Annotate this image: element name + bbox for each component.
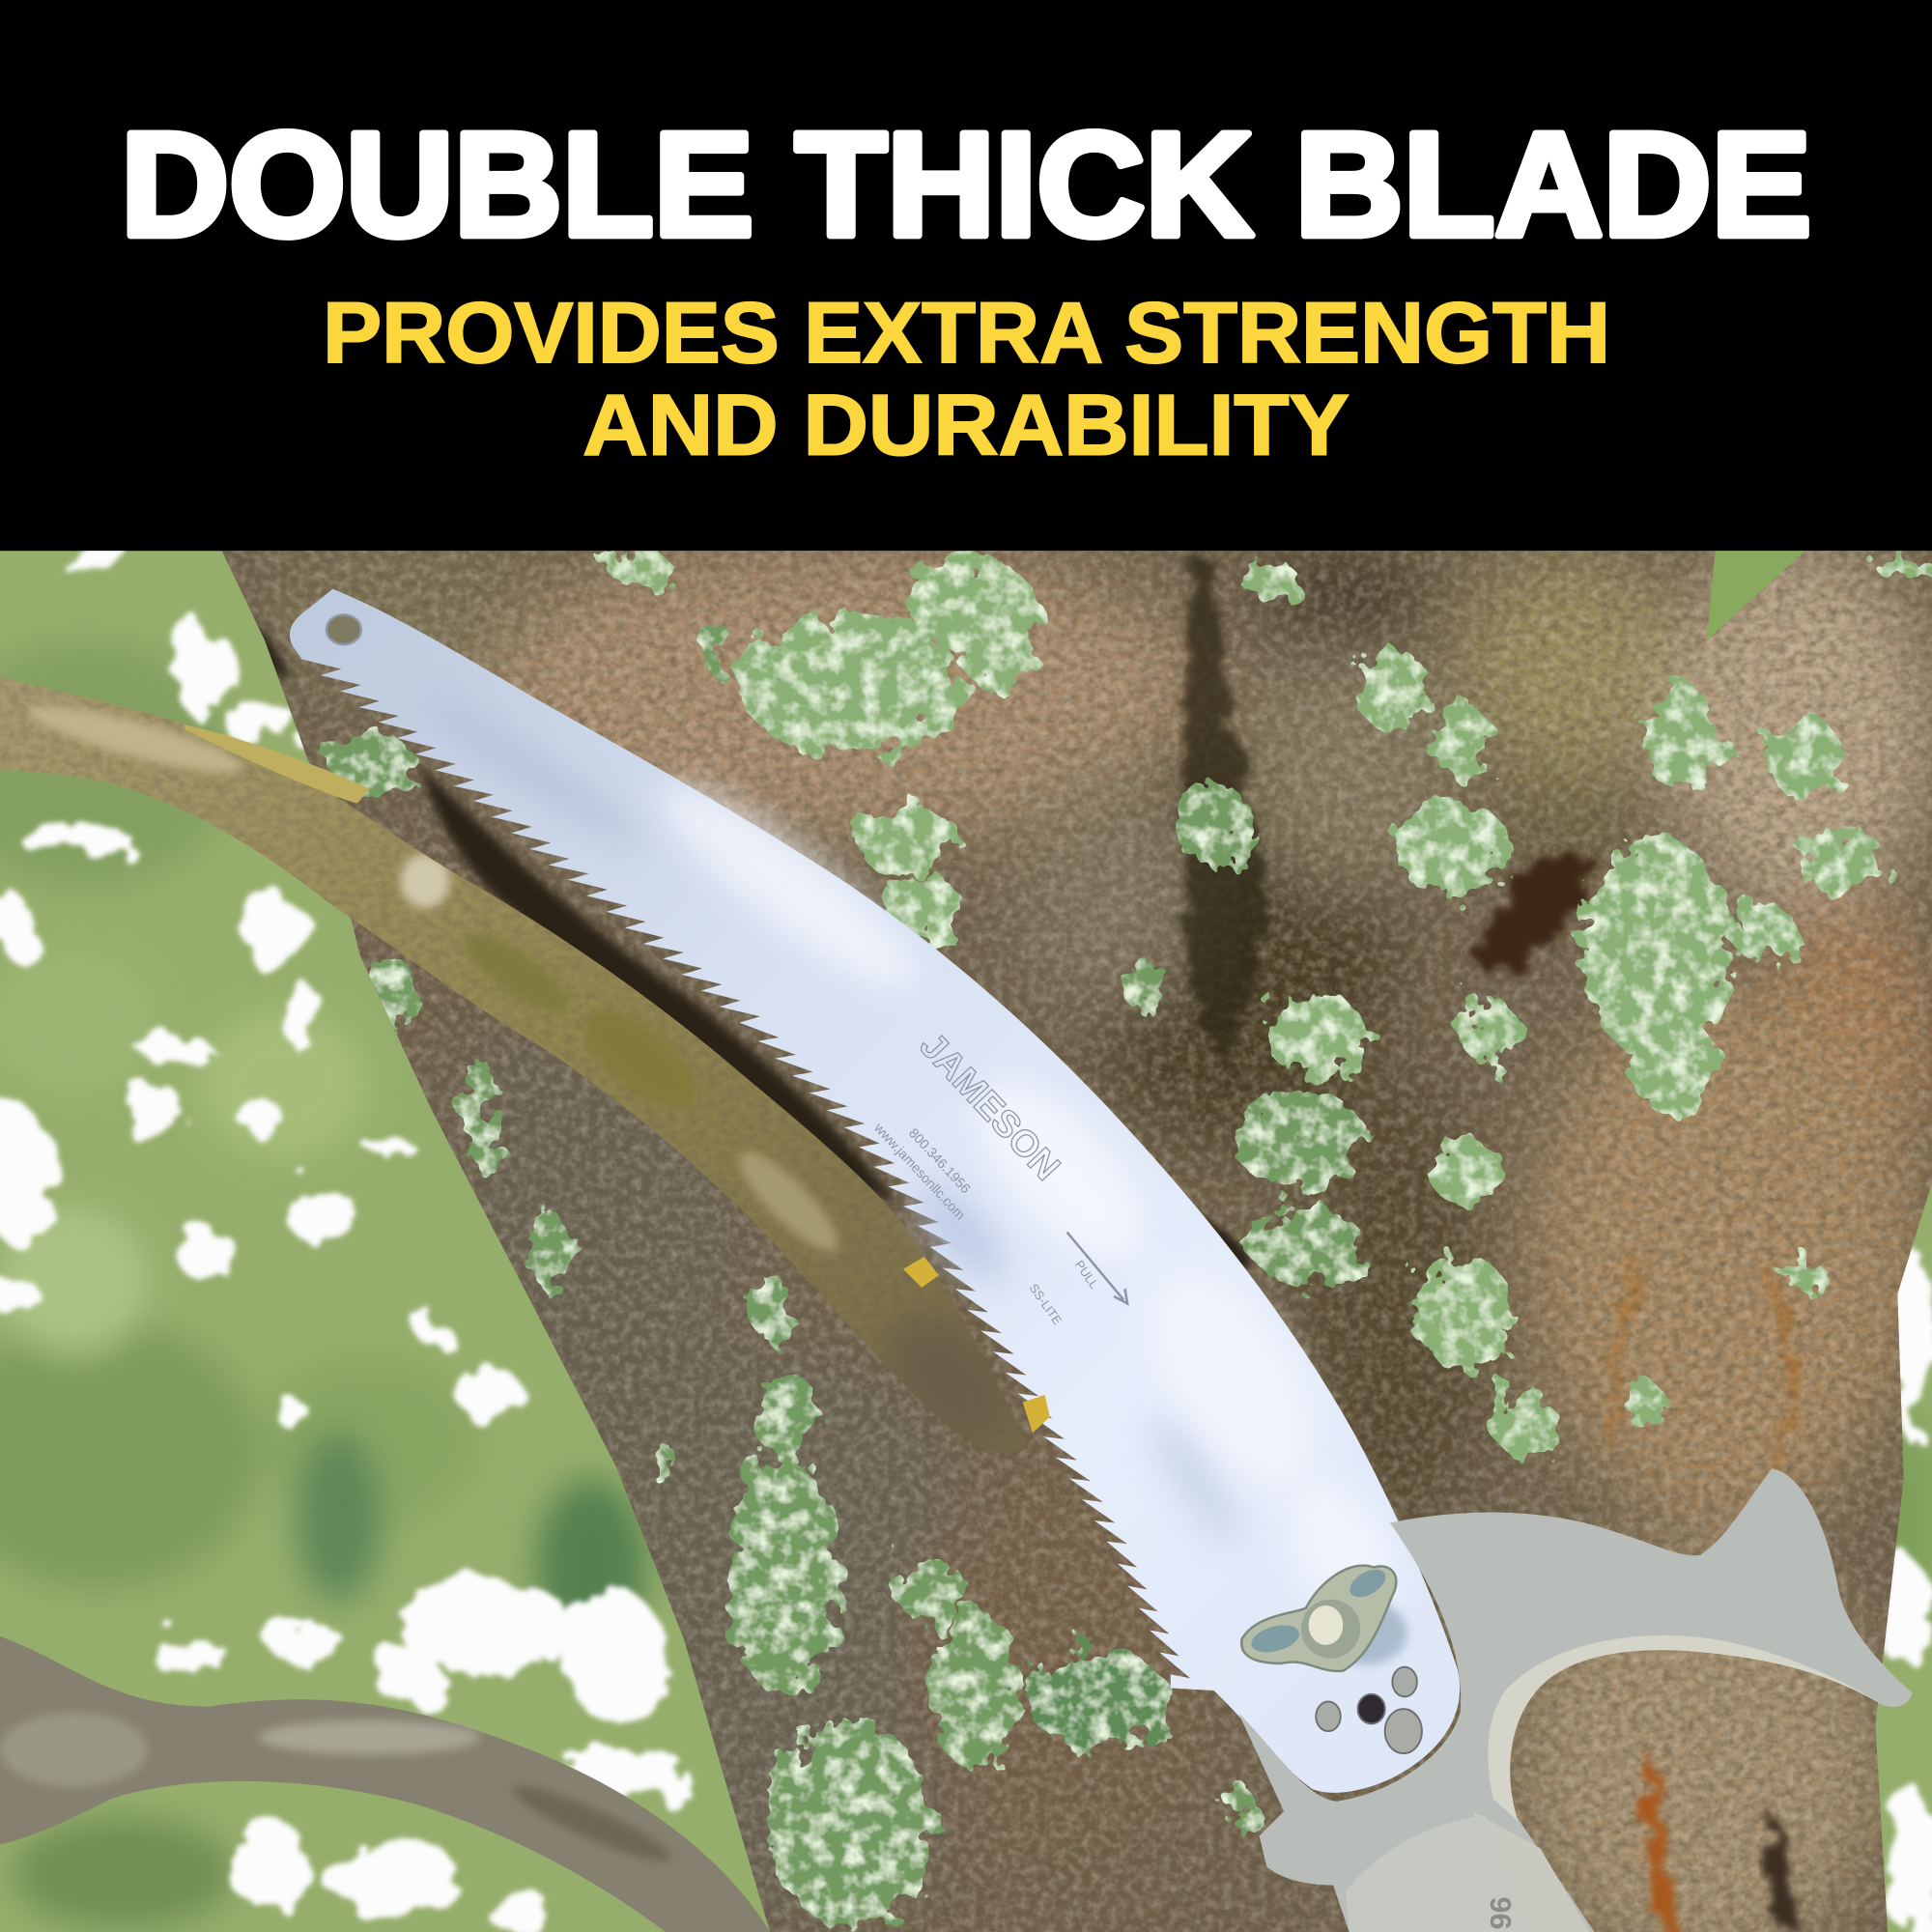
wing nut [1241,1564,1407,1671]
model number: 96 [1485,1896,1518,1929]
lower-left gray branch [0,1636,770,1932]
blade printing [870,1025,1101,1327]
black header band [0,0,1932,551]
blade mounting hole [327,614,361,644]
tree trunk [185,542,1932,1932]
title: DOUBLE THICK BLADE [121,102,1811,268]
saw blade [290,589,1460,1793]
photo: saw blade on tree [0,542,1932,1932]
blade printing: 800.346.1956 [906,1125,974,1196]
cut branch [0,666,1047,1479]
lichen patches [326,552,1931,1928]
shadow under blade teeth [419,764,899,1208]
blade printing: SS-LITE [1027,1281,1065,1327]
pull arrow [1067,1233,1127,1303]
foliage background [0,545,1932,1932]
pole saw handle bracket [1238,1468,1913,1932]
blade printing: PULL [1072,1258,1101,1292]
resin on teeth [903,1257,1050,1433]
blade printing: www.jamesonllc.com [870,1120,969,1223]
bark crevices [210,554,1802,1932]
slot holes in blade [1316,1667,1422,1753]
subtitle [323,284,1610,473]
subtitle: PROVIDES EXTRA STRENGTH [323,284,1610,381]
blade printing: JAMESON [912,1025,1068,1188]
subtitle: AND DURABILITY [582,377,1350,473]
